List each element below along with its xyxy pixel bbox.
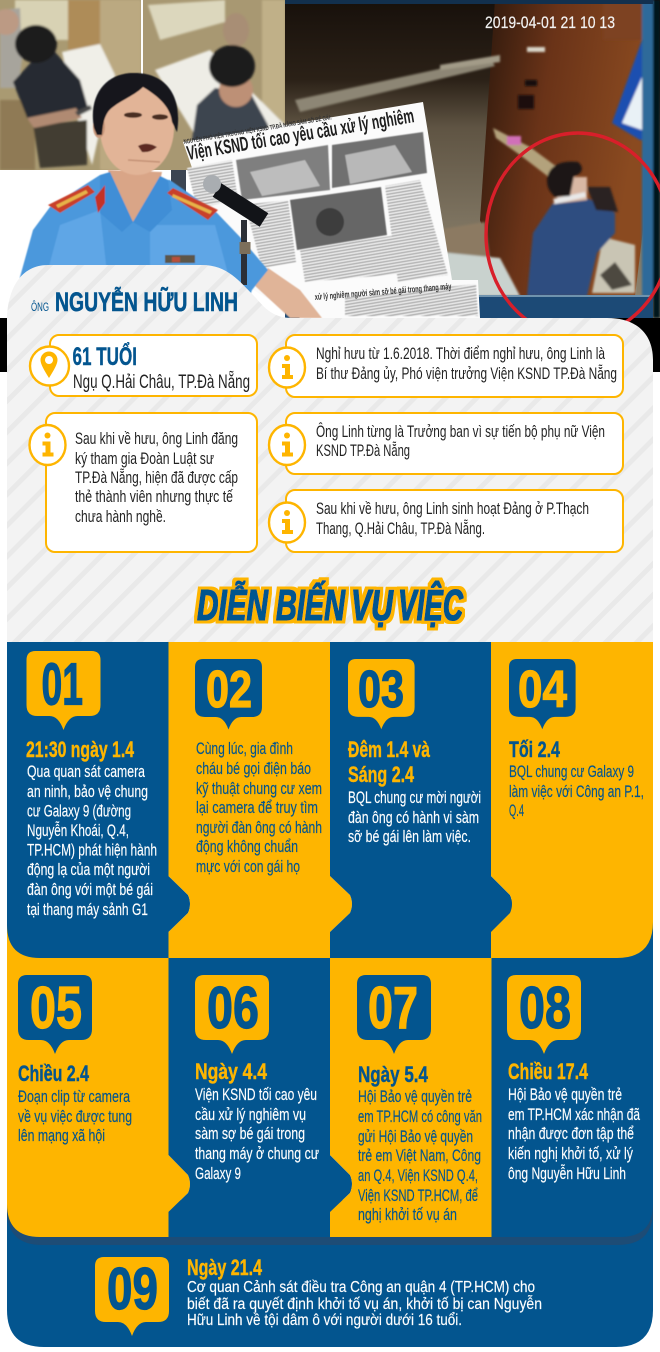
- card: legal association: [30, 413, 257, 552]
- body 01: an ninh, bảo vệ chung: [27, 782, 148, 801]
- body 03: BQL chung cư mời người: [348, 788, 481, 807]
- body 01: cư Galaxy 9 (đường: [27, 802, 131, 820]
- badge 01: [26, 651, 100, 730]
- residence: Ngụ Q.Hải Châu, TP.Đà Nẵng: [73, 372, 250, 393]
- step 03: [348, 659, 481, 846]
- date 09: Ngày 21.4: [187, 1255, 263, 1280]
- body 06: [195, 1085, 319, 1183]
- panel: step 01: [7, 642, 190, 958]
- body 06: sàm sợ bé gái trong: [195, 1124, 305, 1143]
- honorific: ÔNG: [31, 299, 49, 314]
- date 05: Chiều 2.4: [18, 1061, 90, 1086]
- panel: step 02: [168, 642, 352, 958]
- panel: step 06: [168, 958, 352, 1237]
- step 09: [95, 1255, 542, 1336]
- step 02: [195, 659, 322, 876]
- card: retirement: [269, 335, 623, 397]
- badge 09: [95, 1256, 169, 1336]
- step 08: [507, 975, 640, 1183]
- section heading: BIẾN: [276, 580, 346, 630]
- step 01: [26, 651, 157, 919]
- card: women's progress committee: KSND TP.Đà Nẵng: [316, 441, 410, 460]
- panel: step 03: [330, 642, 512, 958]
- badge 06: [195, 975, 269, 1054]
- body 09: biết đã ra quyết định khởi tố vụ án, khởi tố bị can Nguyễn: [187, 1294, 542, 1313]
- card: legal association: thẻ thành viên nhưng thực tế: [75, 487, 233, 506]
- body 07: nghị khởi tố vụ án: [358, 1205, 457, 1224]
- body 06: Galaxy 9: [195, 1164, 241, 1183]
- icon: info: [269, 502, 305, 542]
- date 07: Ngày 5.4: [358, 1062, 429, 1087]
- body 02: [196, 739, 322, 876]
- date 08: Chiều 17.4: [508, 1059, 589, 1084]
- badge 02: [195, 659, 262, 729]
- badge 05: [18, 975, 92, 1054]
- card: legal association: chưa hành nghề.: [75, 507, 166, 526]
- step 05: [18, 975, 132, 1145]
- newspaper headline: Viện KSND tối cao yêu cầu xử lý nghiêm: [185, 105, 416, 165]
- badge 07: [357, 975, 431, 1054]
- body 09: Cơ quan Cảnh sát điều tra Công an quận 4 (TP.HCM) cho: [187, 1279, 535, 1296]
- section heading: DIỄN: [197, 580, 269, 630]
- body 01: Nguyễn Khoái, Q.4,: [27, 821, 129, 840]
- panel: profile background: [7, 265, 653, 642]
- body 05: về vụ việc được tung: [18, 1107, 132, 1126]
- card: party activity: Thang, Q.Hải Châu, TP.Đà Nẵng.: [316, 519, 485, 538]
- card: legal association: Sau khi về hưu, ông Linh đăng: [75, 429, 238, 448]
- body 07: Hội Bảo vệ quyền trẻ: [358, 1087, 472, 1106]
- section heading: VỤ: [351, 581, 394, 630]
- newspaper columns: [187, 160, 478, 316]
- body 05: lên mạng xã hội: [18, 1126, 105, 1145]
- badge 05: 05: [30, 975, 82, 1041]
- red highlight circle: [486, 133, 660, 337]
- icon: info: [30, 425, 66, 465]
- body 01: TP.HCM) phát hiện hành: [27, 840, 157, 860]
- newspaper kicker: NGUYỄN PHÓ VIỆN TRƯỞNG VIỆN KSND TP.ĐÀ NẴNG SÀM SỠ BÉ GÁI:: [183, 112, 332, 146]
- body 02: cháu bé gọi điện báo: [196, 759, 311, 778]
- badge 03: [348, 659, 415, 729]
- step 04: [509, 659, 644, 820]
- body 02: Cùng lúc, gia đình: [196, 739, 293, 758]
- date 04: Tối 2.4: [509, 737, 561, 762]
- body 01: đàn ông với một bé gái: [27, 880, 153, 899]
- date 01: 21:30 ngày 1.4: [26, 737, 135, 762]
- body 07: [358, 1087, 482, 1224]
- newspaper photos: [236, 132, 427, 250]
- badge 03: 03: [358, 661, 404, 719]
- badge 02: 02: [206, 661, 252, 719]
- body 04: [509, 762, 644, 820]
- panel: step 09 background with shadow: [7, 1200, 653, 1347]
- panel: step 04: [491, 642, 653, 958]
- photo: man in lobby, right: [143, 0, 285, 170]
- badge 04: 04: [518, 661, 567, 719]
- body 06: cầu xử lý nghiêm vụ: [195, 1105, 306, 1124]
- black side band: [0, 318, 660, 372]
- body 07: trẻ em Việt Nam, Công: [358, 1146, 481, 1165]
- panel: step 05: [7, 958, 190, 1237]
- person name: NGUYỄN HỮU LINH: [55, 286, 238, 317]
- card: party activity: [269, 490, 623, 552]
- date 03: [348, 737, 431, 787]
- photo: man in lobby, left: [0, 0, 141, 170]
- body 07: em TP.HCM có công văn: [358, 1107, 482, 1126]
- portrait: man in blue uniform: [20, 73, 322, 322]
- body 07: Viện KSND TP.HCM, để: [358, 1186, 478, 1205]
- badge 09: 09: [107, 1256, 158, 1322]
- body 01: tại thang máy sảnh G1: [27, 900, 148, 919]
- body 08: [508, 1085, 640, 1183]
- body 02: mực với con gái họ: [196, 857, 300, 876]
- panel: step 07: [330, 958, 492, 1237]
- body 01: [27, 762, 157, 919]
- badge 06: 06: [207, 975, 259, 1041]
- badge 01: 01: [42, 652, 83, 718]
- body 02: lại camera để truy tìm: [196, 798, 318, 817]
- body 06: Viện KSND tối cao yêu: [195, 1085, 317, 1104]
- body 07: an Q.4, Viện KSND Q.4,: [358, 1166, 478, 1185]
- microphone: [203, 175, 264, 285]
- date 06: Ngày 4.4: [195, 1059, 268, 1084]
- body 01: Qua quan sát camera: [27, 762, 145, 781]
- age: 61 TUỔI: [72, 341, 137, 371]
- section heading: [197, 580, 464, 630]
- icon: info: [269, 348, 305, 388]
- body 09: Hữu Linh về tội dâm ô với người dưới 16 tuổi.: [187, 1311, 462, 1329]
- newspaper sub-headline: xử lý nghiêm người sàm sỡ bé gái trong thang máy: [314, 281, 452, 302]
- panel: step 08: [492, 958, 653, 1237]
- body 05: Đoạn clip từ camera: [18, 1087, 130, 1106]
- body 06: thang máy ở chung cư: [195, 1144, 319, 1163]
- icon: info: [269, 425, 305, 465]
- badge 08: [507, 975, 581, 1054]
- body 03: đàn ông có hành vi sàm: [348, 808, 479, 827]
- body 03: sỡ bé gái lên làm việc.: [348, 827, 471, 846]
- body 07: gửi Hội Bảo vệ quyền: [358, 1127, 473, 1146]
- body 03: [348, 788, 481, 846]
- badge 08: 08: [519, 975, 571, 1041]
- section heading: VIỆC: [398, 580, 464, 630]
- step 06: [195, 975, 319, 1183]
- body 09: [187, 1279, 542, 1329]
- card: legal association: ký tham gia Đoàn Luật sư: [75, 449, 214, 468]
- body 02: kỹ thuật chung cư xem: [196, 779, 322, 798]
- card: legal association: TP.Đà Nẵng, hiện đã được cấp: [75, 468, 238, 487]
- timestamp: 2019-04-01 21 10 13: [485, 13, 615, 32]
- body 01: động lạ của một người: [27, 860, 150, 879]
- body 02: động không chuẩn: [196, 837, 298, 856]
- name heading: [31, 286, 238, 317]
- badge 07: 07: [368, 975, 418, 1041]
- date 03: Sáng 2.4: [348, 762, 415, 787]
- row backings: [7, 900, 168, 990]
- body 05: [18, 1087, 132, 1145]
- card: age and residence: [30, 335, 257, 396]
- photo: elevator CCTV: [285, 0, 660, 318]
- body 04: Q.4: [509, 801, 524, 820]
- icon: location pin: [30, 346, 69, 386]
- body 02: người đàn ông có hành: [196, 818, 322, 837]
- step 07: [357, 975, 482, 1224]
- newspaper clipping: [171, 102, 480, 318]
- card: women's progress committee: [269, 413, 623, 474]
- date 03: Đêm 1.4 và: [348, 737, 431, 762]
